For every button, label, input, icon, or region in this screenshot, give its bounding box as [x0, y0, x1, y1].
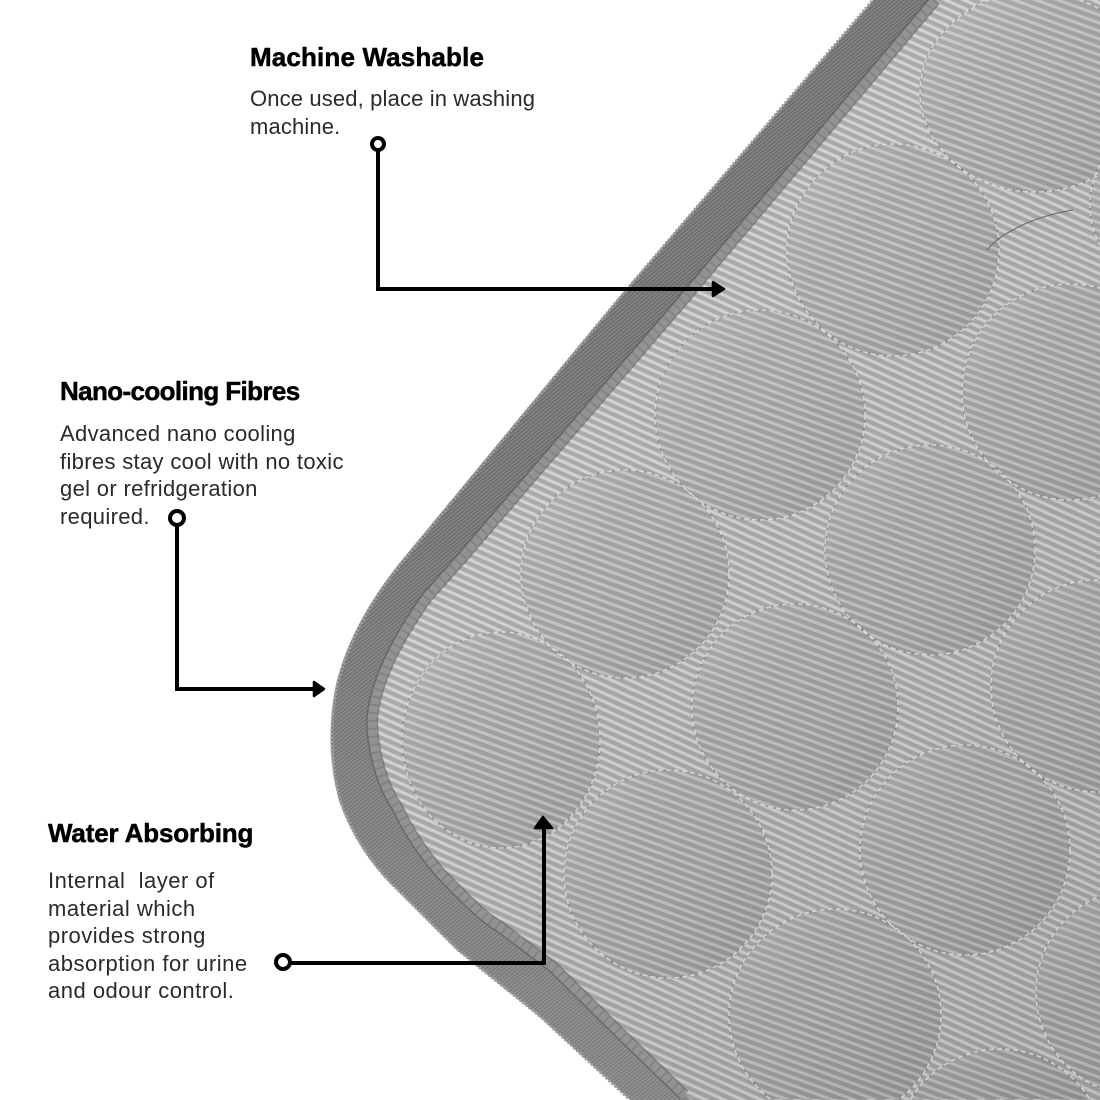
corded edge stitching [372, 0, 935, 1095]
heading: Nano-cooling Fibres: Nano-cooling Fibres [60, 376, 300, 406]
callout text: Machine Washable [250, 42, 535, 139]
body text: Nano-cooling Fibres: gel or refridgeration [60, 476, 258, 501]
body text: Nano-cooling Fibres: required. [60, 504, 150, 529]
quilted fabric panel with circles [376, 0, 1100, 1100]
body text: Nano-cooling Fibres: Advanced nano cooling [60, 421, 296, 446]
body text: Machine Washable: machine. [250, 114, 340, 139]
arrow: Nano-cooling Fibres [170, 511, 324, 696]
arrow: Water Absorbing [276, 817, 552, 969]
heading: Machine Washable: Machine Washable [250, 42, 484, 72]
body text: Machine Washable [250, 86, 535, 139]
body text: Water Absorbing [48, 868, 248, 1003]
body text: Water Absorbing: and odour control. [48, 978, 234, 1003]
heading: Water Absorbing: Water Absorbing [48, 818, 253, 848]
callout text: Water Absorbing [48, 818, 253, 1003]
body text: Water Absorbing: provides strong [48, 923, 206, 948]
body text: Nano-cooling Fibres [60, 421, 344, 529]
product photo: grey quilted cooling mat [330, 0, 1100, 1100]
body text: Nano-cooling Fibres: fibres stay cool with no toxic [60, 449, 344, 474]
body text: Water Absorbing: absorption for urine [48, 951, 248, 976]
arrow: Machine Washable [372, 138, 724, 296]
mat outer binding band [331, 0, 1100, 1100]
body text: Water Absorbing: Internal layer of [48, 868, 215, 893]
body text: Machine Washable: Once used, place in washing [250, 86, 535, 111]
body text: Water Absorbing: material which [48, 896, 196, 921]
callout text: Nano-cooling Fibres [60, 376, 344, 529]
